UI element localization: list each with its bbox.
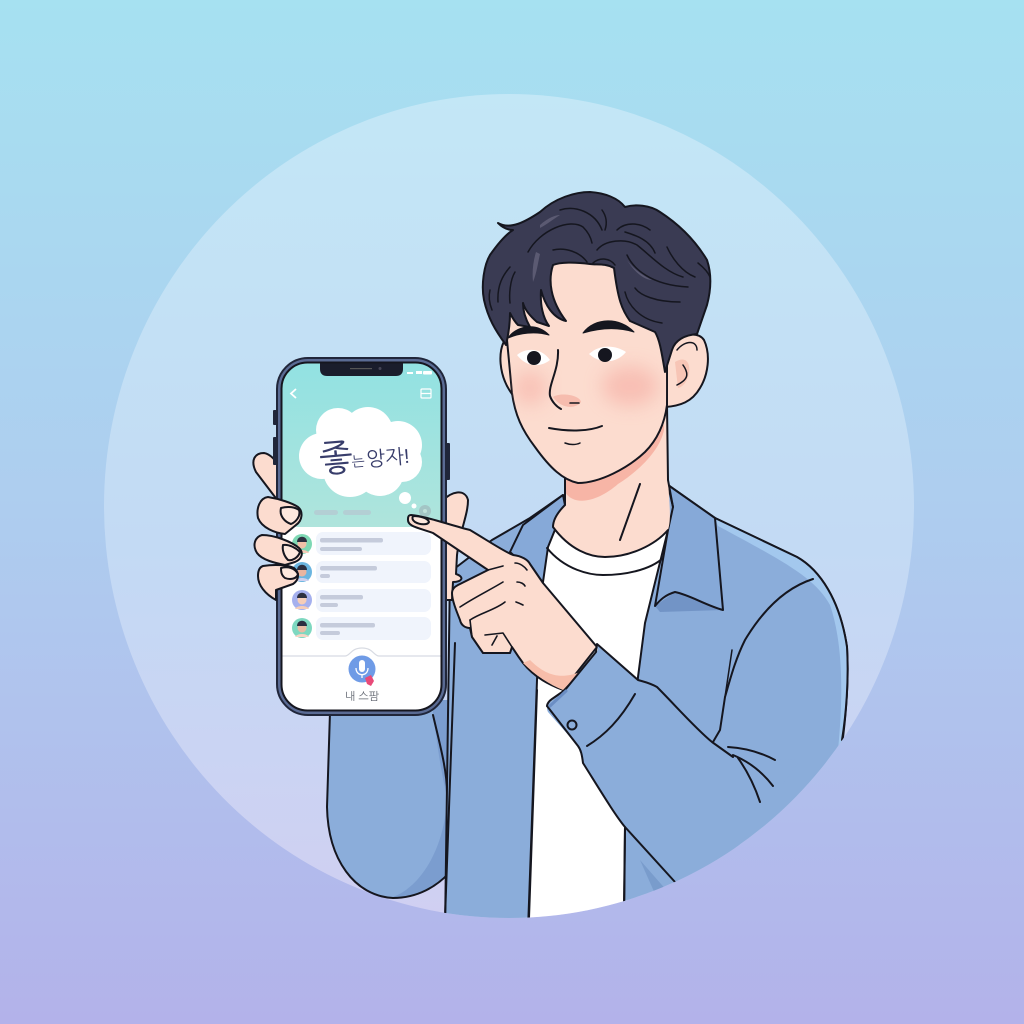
cuff button (568, 720, 576, 730)
back chevron (291, 389, 296, 398)
teal dot (419, 505, 431, 517)
hair (483, 192, 710, 372)
gripping fingers (255, 497, 302, 600)
jacket hem lines (445, 643, 625, 918)
avatar 3 (292, 590, 312, 610)
cloud handwriting: 좋 (317, 436, 355, 479)
menu icon (421, 389, 431, 398)
hair strands (489, 208, 710, 323)
tab bar divider (282, 648, 441, 656)
head (483, 192, 710, 483)
sleeve outline (547, 644, 733, 757)
jacket right collar (655, 485, 723, 610)
background circle (104, 94, 914, 918)
right ear (665, 335, 708, 407)
neck (547, 405, 673, 575)
phone body (277, 358, 446, 715)
face (507, 250, 667, 483)
left ear (500, 340, 520, 394)
eyebrows (508, 327, 549, 338)
microphone button (348, 656, 376, 686)
hair highlights (533, 215, 652, 282)
screen bezel line (282, 362, 442, 710)
cuff seam (587, 694, 635, 746)
status icons (407, 371, 432, 374)
finger 1 (257, 497, 302, 534)
mouth (549, 426, 602, 430)
cloud handwriting: 는 (351, 453, 365, 470)
white t-shirt (525, 530, 668, 930)
far hand behind phone (253, 453, 468, 600)
list card 1 (316, 532, 431, 555)
thought cloud (299, 407, 422, 508)
fingernail (412, 516, 429, 524)
cloud handwriting: 앙자! (366, 446, 410, 471)
torso clothing (445, 485, 848, 930)
tab label: 내 스팜 (345, 690, 379, 703)
finger creases (460, 563, 527, 647)
avatar 4 (292, 618, 312, 638)
nose (553, 395, 581, 407)
header pills (314, 510, 338, 515)
list card 3 (316, 589, 431, 612)
blush (514, 366, 658, 406)
list card 4 (316, 617, 431, 640)
notch (320, 363, 403, 376)
phone (273, 358, 450, 715)
avatar 2 (292, 562, 312, 582)
elbow wrinkles (728, 747, 775, 802)
finger 3 (258, 565, 298, 600)
jacket left lapel (510, 495, 565, 582)
left jacket sleeve (327, 700, 452, 898)
finger 2 (255, 535, 302, 565)
eyes (517, 350, 550, 365)
jacket left front (445, 495, 565, 930)
avatar 1 (292, 534, 312, 554)
phone screen (282, 363, 441, 710)
pointing hand (408, 515, 597, 690)
jacket right front and shoulder (624, 485, 848, 930)
arm seam (713, 579, 813, 742)
list card 2 (316, 561, 431, 583)
cloud handwriting (320, 440, 408, 475)
right jacket forearm sleeve (547, 579, 813, 905)
phone side buttons (273, 410, 450, 480)
